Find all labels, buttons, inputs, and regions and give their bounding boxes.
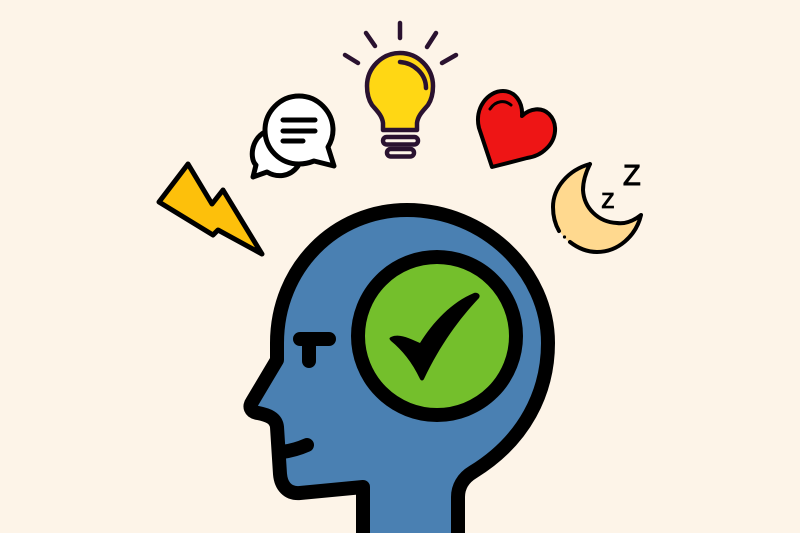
icon: heart xyxy=(478,91,555,167)
eyebrow and eye xyxy=(300,339,329,361)
check mark xyxy=(390,293,480,380)
text: sleep letter small z: z xyxy=(601,183,615,215)
head silhouette xyxy=(250,210,548,533)
text: sleep letter large Z: Z xyxy=(623,160,641,192)
icon: light bulb xyxy=(345,23,456,156)
mouth xyxy=(282,445,307,452)
icon: lightning bolt xyxy=(159,164,262,254)
icon: green check badge xyxy=(358,257,516,415)
icon: crescent moon xyxy=(553,164,641,252)
icon: chat bubbles xyxy=(252,96,334,177)
